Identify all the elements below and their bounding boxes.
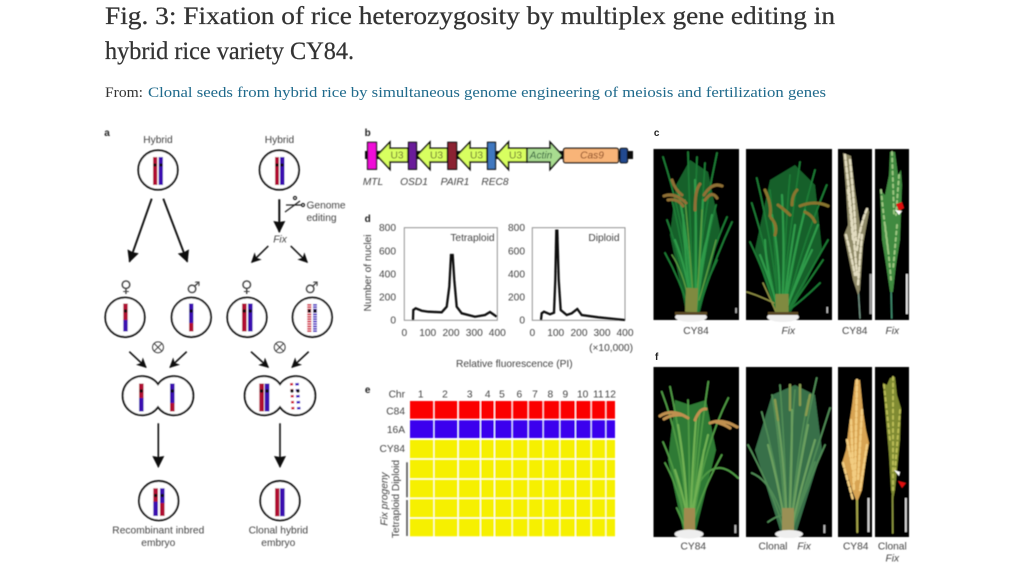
panel f captions: Fix <box>797 542 812 552</box>
embryo labels: embryo <box>141 538 176 549</box>
construct labels: PAIR1 <box>441 177 469 188</box>
construct labels: MTL <box>363 177 383 188</box>
sex symbols: ♀ <box>241 277 253 296</box>
construct labels <box>363 150 604 188</box>
chart: tetraploid: 600 <box>379 246 396 258</box>
sex symbols: ♂ <box>305 278 319 297</box>
panel f captions <box>681 542 907 564</box>
arrows to embryos <box>158 423 280 467</box>
chart: diploid <box>508 223 634 339</box>
row and column labels: 16A <box>387 425 405 436</box>
right dividing cell <box>245 376 315 415</box>
panel f: plant photos: f <box>655 352 659 363</box>
chart: tetraploid: 400 <box>489 328 506 339</box>
arrows to zygotes <box>129 352 309 367</box>
embryo labels: Recombinant inbred <box>112 526 205 536</box>
gene boxes <box>368 142 496 169</box>
construct labels: U3 <box>390 150 404 162</box>
row and column labels: 5 <box>499 390 505 400</box>
chart: diploid: 600 <box>508 246 525 258</box>
panel b: construct map: b <box>365 128 371 139</box>
panel a: breeding schemes: a <box>104 128 110 139</box>
chart: diploid: Diploid <box>588 233 620 244</box>
row and column labels: 8 <box>547 390 553 400</box>
panel a: breeding schemes: Hybrid <box>265 135 295 146</box>
source line: Clonal seeds from hybrid rice by simultaneous genome engineering of meiosis and fertilization genes <box>148 85 826 101</box>
chart: tetraploid: 100 <box>419 328 437 339</box>
chart: diploid: 800 <box>508 223 525 234</box>
photo: CY84 plant <box>654 149 739 322</box>
photo: Fix panicle <box>875 149 909 320</box>
progeny labels: Tetraploid Diploid <box>391 460 402 538</box>
construct labels: U3 <box>470 150 483 162</box>
sex symbols: ♂ <box>186 278 201 297</box>
panel c: plant photos: c <box>654 128 660 139</box>
row and column labels: 1 <box>418 390 424 400</box>
panel f: plant photos <box>654 352 909 564</box>
panel c captions: Fix <box>886 326 900 337</box>
row and column labels: 10 <box>577 390 589 400</box>
title: Fig. 3: Fixation of rice heterozygosity by multiplex gene editing in <box>105 3 836 30</box>
chart: diploid: 100 <box>547 328 565 339</box>
construct labels: OSD1 <box>400 177 428 188</box>
panel f captions: Fix <box>886 554 900 564</box>
row and column labels: 2 <box>442 390 448 400</box>
embryo cells <box>139 481 300 520</box>
chart: tetraploid: 200 <box>379 292 396 304</box>
progeny labels: Fix progeny <box>380 471 390 526</box>
photo: CY84 panicle <box>838 149 872 320</box>
chart: tetraploid: 0 <box>401 328 407 339</box>
chart: diploid: 400 <box>508 270 525 280</box>
photo: Clonal Fix panicle <box>875 367 909 537</box>
sex symbols <box>120 277 319 297</box>
row and column labels: 12 <box>605 390 616 400</box>
embryo labels: embryo <box>261 538 296 549</box>
embryo labels: Clonal hybrid <box>249 526 308 536</box>
chart: tetraploid: 0 <box>390 316 396 326</box>
construct labels: U3 <box>430 150 443 162</box>
photo: CY84 panicle <box>838 367 872 537</box>
panel e: genotype heatmap <box>365 385 616 538</box>
x axis title: Relative fluorescence (PI) <box>456 359 573 370</box>
row and column labels: 9 <box>562 390 568 400</box>
panel c captions: CY84 <box>683 326 709 337</box>
construct labels: REC8 <box>481 177 509 188</box>
row and column labels: 4 <box>485 390 491 400</box>
row and column labels <box>380 390 616 455</box>
photo: Fix plant <box>746 149 832 322</box>
chart: tetraploid: 400 <box>379 270 396 280</box>
genome editing label: editing <box>306 213 337 224</box>
construct labels: U3 <box>509 150 522 162</box>
selfing symbols <box>152 342 285 353</box>
title <box>105 3 836 65</box>
row and column labels: Chr <box>389 390 406 400</box>
panel f captions: CY84 <box>843 542 869 552</box>
chart: tetraploid: 200 <box>442 328 460 339</box>
chart: diploid: 200 <box>508 292 525 304</box>
icon: scissors <box>285 196 304 212</box>
construct labels: Actin <box>529 150 553 162</box>
panel c captions: CY84 <box>842 326 868 337</box>
heatmap grid <box>410 400 615 538</box>
left dividing cell <box>123 376 193 415</box>
title: hybrid rice variety CY84. <box>105 38 354 65</box>
left hybrid cell <box>138 150 178 190</box>
panel a: breeding schemes: Hybrid <box>143 135 173 146</box>
sex symbols: ♀ <box>120 277 132 296</box>
progeny brackets <box>406 462 408 536</box>
source line: From: <box>105 85 143 101</box>
panel b: construct map <box>363 128 633 188</box>
chart: tetraploid: 300 <box>466 328 483 339</box>
chart: diploid: 300 <box>594 328 611 339</box>
chart: diploid: 0 <box>529 328 535 339</box>
row and column labels: CY84 <box>380 444 405 455</box>
chart: tetraploid: Tetraploid <box>450 233 495 244</box>
row and column labels: 6 <box>516 390 522 400</box>
Cas9 box <box>564 148 618 163</box>
right hybrid cell <box>260 150 299 190</box>
row and column labels: 7 <box>532 390 538 400</box>
genome editing label: Genome <box>306 200 346 212</box>
chart: tetraploid: 800 <box>379 223 396 234</box>
genome editing arrow <box>278 199 280 232</box>
gamete cells <box>105 298 332 337</box>
panel f captions: Clonal <box>878 542 907 552</box>
U3 arrows <box>377 142 527 170</box>
embryo labels <box>112 526 308 549</box>
panel e: genotype heatmap: e <box>365 385 371 396</box>
panel c: plant photos <box>654 128 909 337</box>
photo: CY84 plant <box>654 367 739 538</box>
row and column labels: C84 <box>386 406 405 418</box>
panel d: flow cytometry <box>363 214 634 370</box>
fix label: Fix <box>273 234 288 246</box>
actin arrow <box>527 142 562 170</box>
progeny labels <box>380 460 402 538</box>
construct labels: Cas9 <box>580 150 604 162</box>
panel d: flow cytometry: d <box>365 214 371 225</box>
chart: tetraploid <box>379 223 506 339</box>
row and column labels: 11 <box>593 390 604 400</box>
panel c captions <box>683 326 900 337</box>
arrows from fix <box>252 246 307 262</box>
x axis note: (×10,000) <box>589 343 633 354</box>
panel f captions: Clonal <box>759 542 787 552</box>
panel f captions: CY84 <box>681 542 706 552</box>
panel a: breeding schemes <box>104 128 346 549</box>
row and column labels: 3 <box>467 390 473 400</box>
panel c captions: Fix <box>782 326 796 337</box>
chart: diploid: 200 <box>570 328 588 339</box>
chart: diploid: 400 <box>616 328 634 339</box>
arrows from left hybrid <box>130 199 187 262</box>
photo: Clonal Fix plant <box>746 367 832 538</box>
y axis title: Number of nuclei <box>363 234 374 312</box>
chart: diploid: 0 <box>519 316 525 326</box>
